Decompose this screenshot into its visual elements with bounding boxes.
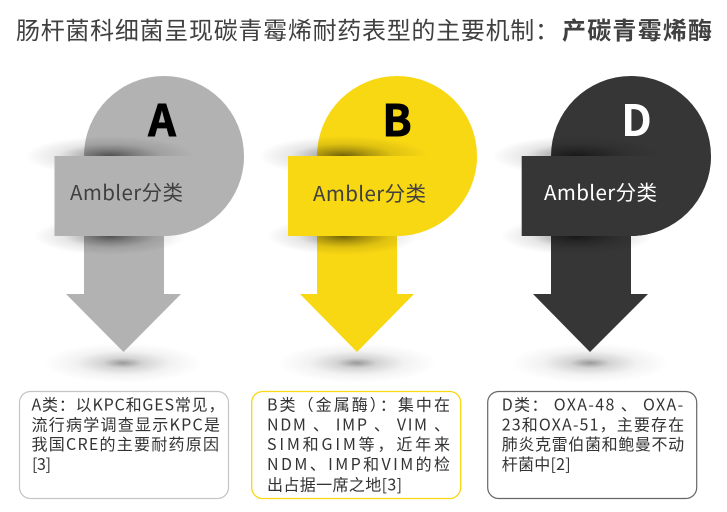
callout: class B text box: B类（金属酶）：集中在 — [267, 392, 450, 416]
label text D: Ambler分类 — [544, 176, 657, 206]
arrow shadow B — [277, 343, 437, 383]
circle A — [84, 76, 244, 236]
arrow D — [533, 230, 648, 352]
callout: class B text box: NDM、IMP和VIM的检 — [267, 451, 450, 475]
title: 肠杆菌科细菌呈现碳青霉烯耐药表型的主要机制： — [16, 18, 559, 45]
arrow B — [300, 230, 414, 352]
label text B: Ambler分类 — [313, 177, 426, 207]
shadow above label B — [258, 136, 428, 176]
label text A: Ambler分类 — [70, 176, 183, 206]
callout: class D text box: 23和OXA-51，主要存在 — [502, 412, 684, 436]
shadow above label A — [25, 136, 195, 176]
arrow A — [66, 230, 181, 352]
letter D: D — [621, 87, 652, 149]
circle D — [551, 76, 711, 236]
label band B — [288, 156, 477, 236]
shadow below label B — [267, 217, 419, 255]
callout: class A text box: 我国CRE的主要耐药原因 — [32, 431, 219, 455]
letter B: B — [382, 87, 412, 149]
shadow below label A — [34, 217, 186, 255]
callout: class A text box — [20, 392, 228, 498]
callout: class B text box — [252, 392, 461, 498]
callout: class D text box: D类： OXA-48 、 OXA- — [502, 392, 683, 416]
panel: class B arrow — [258, 76, 477, 383]
title: 产碳青霉烯酶 — [562, 18, 712, 45]
callout: class B text box: 出占据一席之地[3] — [267, 472, 402, 496]
callout: class B text box: SIM和GIM等，近年来 — [267, 431, 450, 455]
shadow below label D — [501, 217, 653, 255]
shadow above label D — [492, 136, 662, 176]
callout: class D text box — [488, 392, 697, 498]
panel: class D arrow — [492, 76, 711, 383]
arrow shadow A — [43, 343, 203, 383]
circle B — [317, 76, 477, 236]
callout: class D text box: 肺炎克雷伯菌和鲍曼不动 — [502, 431, 684, 455]
callout: class B text box: NDM 、 IMP 、 VIM 、 — [267, 412, 450, 436]
callout: class A text box: [3] — [32, 451, 51, 475]
arrow shadow D — [510, 343, 670, 383]
label band D — [522, 156, 711, 236]
callout: class A text box: A类：以KPC和GES常见， — [32, 392, 224, 416]
panel: class A arrow — [25, 76, 244, 383]
callout: class A text box: 流行病学调查显示KPC是 — [32, 412, 220, 436]
callout: class D text box: 杆菌中[2] — [502, 451, 571, 475]
label band A — [54, 156, 244, 236]
letter A: A — [147, 87, 176, 149]
